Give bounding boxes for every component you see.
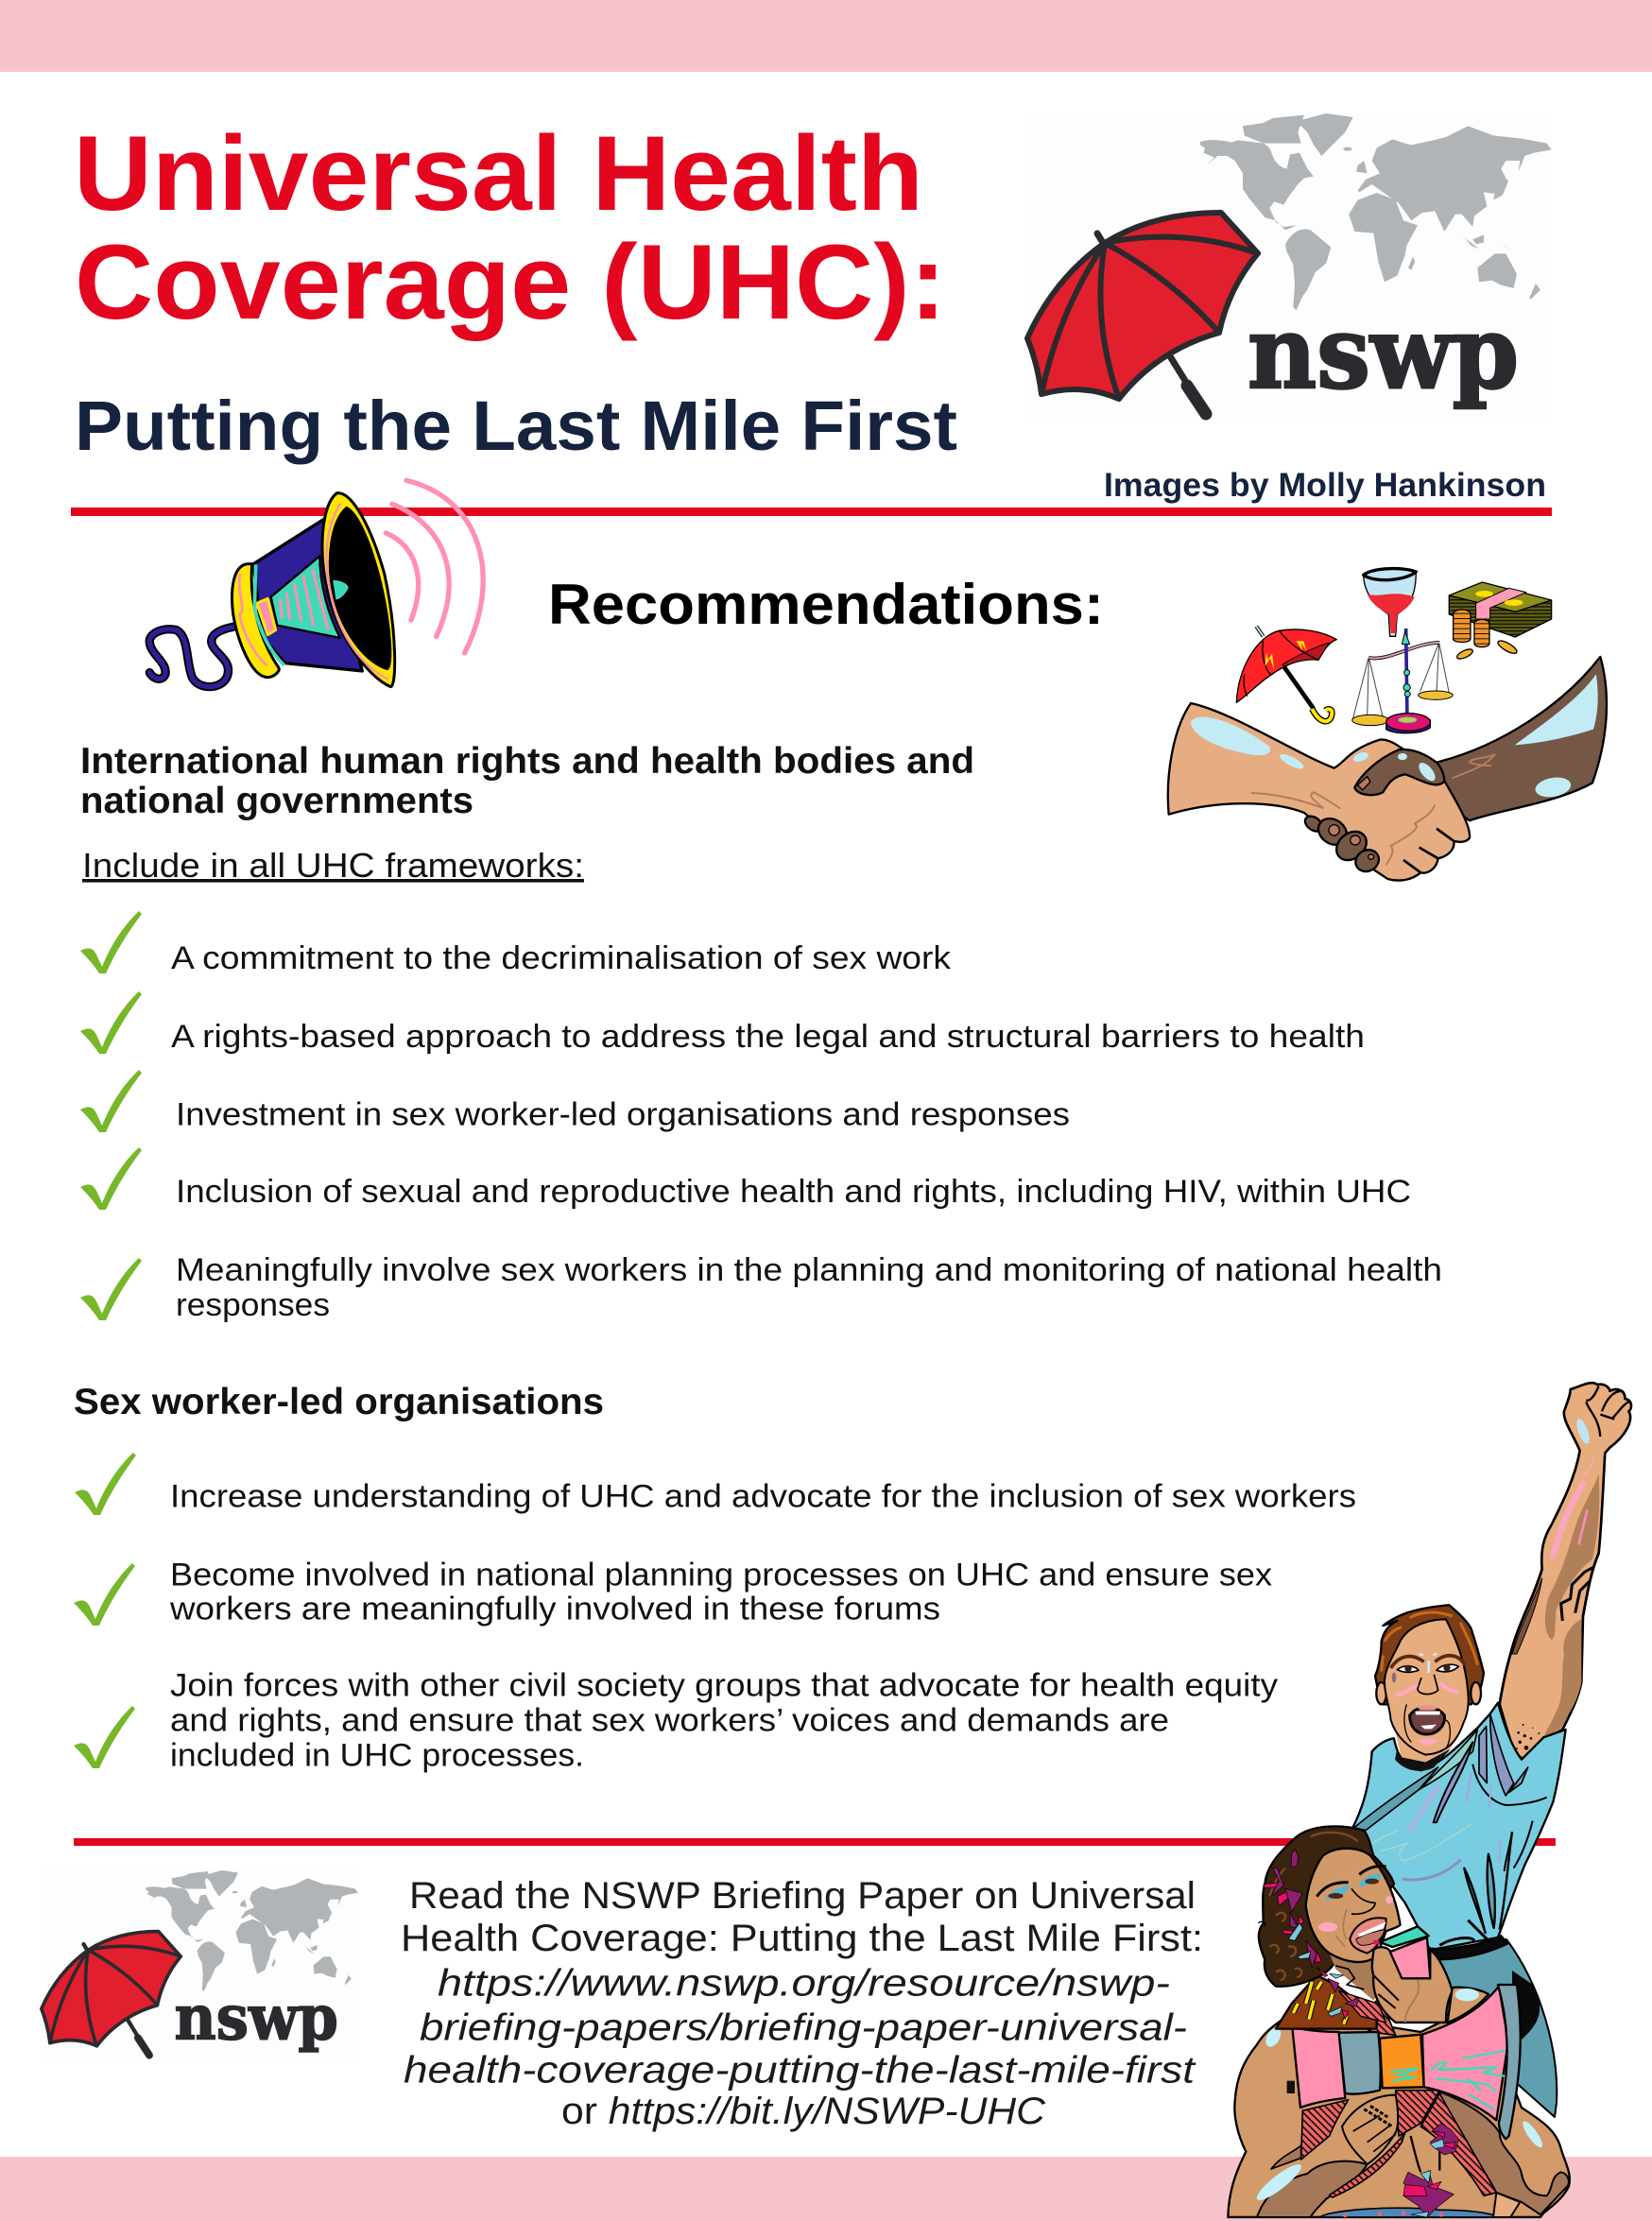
head, hair and hand — [1259, 1826, 1489, 2029]
face — [1306, 1849, 1401, 1962]
hair flowers — [1264, 1850, 1359, 2020]
scales — [1352, 628, 1453, 733]
item 6: Increase understanding of UHC and advocate for the inclusion of sex workers — [170, 1478, 1356, 1514]
tick 6 — [75, 1453, 136, 1515]
horn body — [253, 520, 362, 671]
item 1: A commitment to the decriminalisation of sex work — [171, 940, 952, 976]
rear ring — [232, 564, 279, 678]
shirt folds and belt — [1403, 1832, 1512, 1959]
money — [1449, 582, 1552, 661]
world map — [1200, 113, 1552, 310]
hand with microphone — [1378, 1937, 1430, 1980]
illustration: protesters — [1228, 1383, 1631, 2217]
heading: recommendations: Recommendations: — [548, 573, 1104, 636]
tick 7 — [74, 1563, 135, 1626]
item 5: responses — [176, 1287, 330, 1323]
footer text with links — [401, 1875, 1203, 2132]
man with raised fist — [1351, 1383, 1631, 2117]
logo: nswp small — [40, 1870, 358, 2057]
sound waves — [386, 480, 483, 653]
logo: nswp main — [1024, 113, 1552, 418]
umbrella — [1027, 213, 1258, 414]
item 8 — [170, 1667, 1278, 1773]
heading: international bodies: national governments — [80, 781, 473, 821]
title: Universal Health — [74, 114, 923, 232]
tick 8 — [74, 1706, 135, 1768]
heading: sex worker-led organisations: Sex worker-led organisations — [74, 1382, 604, 1422]
logo: nswp small: nswp — [175, 1982, 338, 2054]
item 7: workers are meaningfully involved in these forums — [169, 1592, 940, 1627]
face — [1385, 1619, 1469, 1755]
title: Coverage (UHC): — [75, 223, 946, 341]
footer text with links: https://www.nswp.org/resource/nswp- — [438, 1962, 1170, 2004]
subtitle: Putting the Last Mile First — [75, 387, 957, 465]
footer text with links: Read the NSWP Briefing Paper on Universal — [409, 1875, 1196, 1917]
item 8: Join forces with other civil society groups that advocate for health equity — [170, 1667, 1278, 1703]
item 7: Become involved in national planning processes on UHC and ensure sex — [170, 1558, 1272, 1593]
skirt — [1430, 1939, 1557, 2117]
tick 1 — [80, 911, 142, 973]
item 8: and rights, and ensure that sex workers’ voices and demands are — [170, 1703, 1169, 1739]
item 5: Meaningfully involve sex workers in the planning and monitoring of national health — [176, 1252, 1442, 1288]
icon: megaphone — [149, 480, 483, 687]
item 4: Inclusion of sexual and reproductive health and rights, including HIV, within UHC — [176, 1174, 1411, 1210]
footer text with links: health-coverage-putting-the-last-mile-first — [404, 2049, 1196, 2091]
bottom band — [0, 2157, 1652, 2221]
neck and collar — [1394, 1727, 1463, 1763]
woman with megaphone — [1228, 1826, 1570, 2217]
item 3: Investment in sex worker-led organisations and responses — [176, 1096, 1070, 1132]
hair — [1375, 1605, 1484, 1704]
footer text with links: Health Coverage: Putting the Last Mile First: — [401, 1918, 1203, 1959]
item 2: A rights-based approach to address the legal and structural barriers to health — [171, 1019, 1365, 1055]
tick 5 — [80, 1258, 142, 1320]
title — [74, 114, 946, 341]
neck — [1330, 1954, 1386, 2001]
goblet — [1364, 569, 1416, 636]
megaphone held by woman — [1292, 1985, 1521, 2139]
list: recommendations for organisations — [74, 1453, 1356, 1773]
flowers — [1403, 2124, 1458, 2217]
heading: international bodies — [80, 741, 974, 821]
credit: Images by Molly Hankinson — [1104, 467, 1546, 504]
item 5 — [176, 1252, 1442, 1323]
tick 4 — [80, 1147, 142, 1210]
red divider bottom — [74, 1838, 1556, 1846]
cable — [149, 627, 233, 687]
handshake — [1168, 657, 1607, 881]
item 8: included in UHC processes. — [170, 1737, 584, 1773]
torso and head — [1351, 1605, 1566, 1950]
logo wordmark: nswp — [1248, 293, 1519, 411]
heading: international bodies: International human rights and health bodies and — [80, 741, 974, 782]
raised arm — [1500, 1383, 1631, 1759]
top band — [0, 0, 1652, 72]
tick 3 — [80, 1070, 142, 1132]
tick 2 — [80, 991, 142, 1054]
footer text with links: or https://bit.ly/NSWP-UHC — [561, 2091, 1046, 2132]
item 7 — [169, 1558, 1272, 1627]
red divider top — [71, 508, 1552, 516]
subheading: frameworks: Include in all UHC frameworks: — [82, 846, 584, 885]
bell — [322, 493, 395, 687]
body — [1228, 1985, 1570, 2217]
small umbrella — [1236, 627, 1336, 721]
footer text with links: briefing-papers/briefing-paper-universal- — [420, 2007, 1187, 2049]
list: recommendations for governments — [80, 911, 1442, 1323]
illustration: handshake with umbrella, scales, money — [1168, 569, 1607, 881]
